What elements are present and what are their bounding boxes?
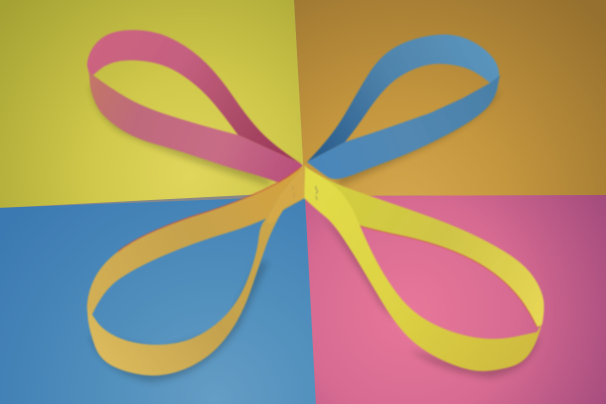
centre fold shade [266,168,304,224]
quadrant: blue [0,196,316,404]
red edge of right band [360,226,537,327]
quadrant: orange [294,0,606,196]
yellow left lower band [87,165,305,376]
ribbon: pink loop [87,30,303,184]
yellow left upper band [87,165,305,315]
quadrant: pink [305,195,606,404]
ribbon: yellow left loop [87,165,305,376]
pink upper band [87,30,300,163]
red edge of left band [118,168,300,252]
pink lower band [89,72,303,184]
blue lower band [307,75,500,179]
blue upper band [307,34,499,162]
ribbon: blue loop [307,34,500,179]
ribbon shadows [90,85,540,382]
yellow right upper band [307,168,544,327]
yellow right lower band [304,165,542,371]
staple marks [293,186,317,200]
quadrant: yellow [0,0,305,208]
ribbon: yellow right loop [293,165,544,371]
